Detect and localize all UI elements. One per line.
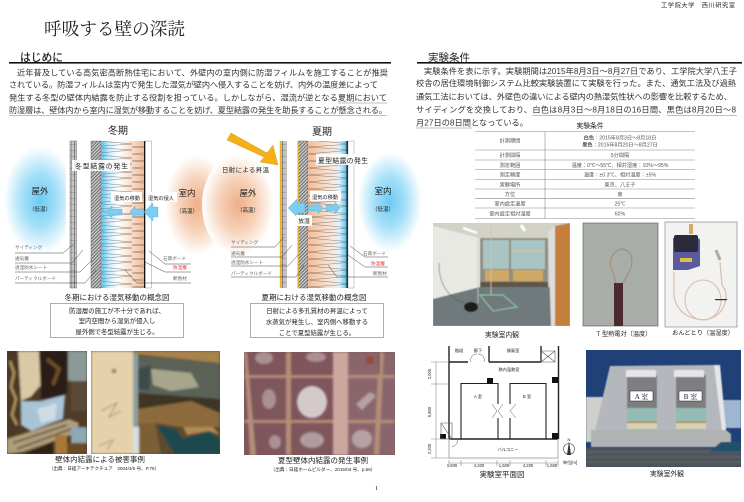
wall layer labels: パーティクルボード (15, 275, 56, 282)
sign: room B: B 室 (684, 392, 697, 401)
caption: floor plan: 実験室平面図 (480, 469, 524, 479)
labels: outdoor: 屋外 (239, 188, 257, 198)
table: experimental conditions: 室内設定温度 (494, 200, 526, 208)
labels: outdoor (237, 188, 259, 214)
sign: room A (630, 391, 653, 401)
outdoor hot glow (202, 155, 274, 255)
north compass: N (568, 437, 571, 442)
caption: thermocouple: T 型熱電対（温度） (597, 330, 651, 338)
photo: winter condensation damage, right (91, 351, 220, 454)
table: experimental conditions: 5分間隔 (611, 151, 629, 159)
wall layer labels: 石膏ボード (163, 255, 186, 262)
table title: 実験条件 (576, 121, 604, 130)
floor plan: 1,600 (499, 463, 510, 468)
callout: summer condensation: 夏型結露の発生 (318, 156, 368, 165)
wall layer labels: 防湿層 (173, 264, 187, 271)
label: solar heating: 日射による昇温 (222, 165, 270, 174)
labels: indoor (176, 188, 198, 215)
header: laboratory name: 工学院大学 西川研究室 (661, 2, 735, 10)
wall layer labels: サイディング (231, 239, 259, 246)
labels: outdoor (29, 186, 51, 213)
caption: condensation damage: 壁体内結露による被害事例 (55, 454, 145, 464)
intro paragraph: 防湿層は、壁体内から室内に湿気が移動することを妨げ、夏型結露の発生を助長することが懸念される。 (9, 105, 387, 115)
labels: indoor: （低温） (372, 205, 394, 213)
table: experimental conditions: 東京、八王子 (604, 180, 636, 188)
heading: winter: 冬期 (108, 124, 128, 137)
wall layer labels: 通気層 (15, 255, 29, 262)
caption: exterior: 実験室外観 (650, 469, 684, 478)
dimension lines (431, 362, 558, 466)
floor plan: 廊下 (474, 347, 482, 354)
label: moisture movement (310, 191, 341, 201)
explanation box: summer: 日射による多孔質材の昇温によって (266, 306, 368, 315)
indoor warm glow (165, 155, 229, 255)
caption: interior: 実験室内観 (485, 330, 519, 339)
doors (452, 354, 516, 447)
caption: summer condensation: 夏型壁体内結露の発生事例 (278, 455, 368, 465)
wall layer labels (231, 237, 388, 277)
photo: T-type thermocouple (583, 223, 658, 326)
table: experimental conditions: 25℃ (615, 200, 625, 208)
moisture movement labels: 湿気の侵入 (148, 194, 175, 202)
conditions paragraph: 実験条件を表に示す。実験期間は2015年8月3日～8月27日であり、工学院大学八王子 (424, 66, 737, 76)
floor plan: A 室 (474, 393, 482, 399)
walls (449, 346, 558, 439)
wall layer labels: 透湿防水シート (15, 264, 47, 271)
conditions paragraph: サイディングを交換しており、白色は8月3日～8月18日の16日間、黒色は8月20日～8 (416, 104, 736, 114)
table: experimental conditions: 60% (615, 212, 626, 218)
explanation box: winter (50, 304, 184, 338)
intro paragraph (9, 68, 388, 116)
sign: room B (679, 391, 702, 401)
stair symbol and columns (441, 351, 555, 439)
explanation box: winter: 防湿層の施工が不十分であれば、 (69, 306, 165, 315)
label: moisture movement: 湿気の移動 (312, 193, 338, 201)
outdoor cold glow (4, 146, 76, 254)
source: summer photo: （出典：日経ホームビルダー、2015/03 号、p.66） (271, 466, 375, 473)
photo: summer condensation example (244, 352, 395, 455)
wall layer labels: 防湿層 (371, 260, 385, 267)
table: experimental conditions: 測定精度 (500, 170, 520, 178)
indoor cool glow (358, 152, 422, 252)
table: experimental conditions: 実験場所 (500, 180, 520, 188)
floor plan: 階段 (455, 347, 464, 354)
conditions paragraph (416, 66, 737, 128)
wall layer labels: 断熱材 (173, 275, 187, 282)
table: experimental conditions: 黒色：2015年8月20日～8月27日 (582, 140, 658, 148)
table: experimental conditions: 温度：0℃～55℃、相対湿度：10%～95% (572, 161, 669, 169)
diagram: summer wall (202, 126, 422, 338)
photo: Ondotori logger (665, 222, 737, 327)
title: 呼吸する壁の深読 (44, 19, 185, 39)
wall layer labels: 通気層 (231, 250, 245, 257)
caption: Ondotori: おんどとり（温湿度） (672, 329, 734, 337)
table: experimental conditions: 南 (617, 190, 623, 198)
table: experimental conditions: 計測間隔 (500, 151, 520, 159)
table: experimental conditions: 計測期間 (500, 136, 520, 144)
arrows: moisture moving outward (105, 203, 158, 221)
conditions paragraph: 通気工法においては、外壁色の違いによる壁内の熱湿気性状への影響を比較するため、 (416, 92, 732, 102)
labels: indoor: （高温） (176, 207, 198, 215)
wall layer labels: 断熱材 (373, 270, 387, 277)
labels: outdoor: （高温） (237, 206, 259, 214)
explanation box: summer: 水蒸気が発生し、室内側へ移動する (266, 317, 368, 326)
intro paragraph: 発生する冬型の壁体内結露を防止する役割を担っている。しかしながら、湿流が逆となる夏期において (9, 92, 387, 102)
caption: summer: 夏期における湿気移動の概念図 (262, 292, 366, 302)
heading: introduction: はじめに (20, 51, 63, 64)
callout: winter condensation: 冬型結露の発生 (75, 162, 128, 170)
photo: test room interior (433, 223, 570, 326)
moisture movement labels: 湿気の移動 (114, 194, 140, 202)
moisture movement labels (111, 192, 177, 202)
explanation box: winter: 屋外側で冬型結露が生じる。 (75, 327, 159, 336)
wall section (277, 141, 355, 288)
table: experimental conditions: 方位 (505, 190, 515, 198)
explanation box: winter: 室内空間から湿気が侵入し (79, 316, 155, 325)
callout: winter condensation (72, 160, 130, 171)
floor plan (427, 346, 577, 468)
page number: 1 (375, 485, 378, 492)
heading: experimental conditions: 実験条件 (428, 51, 470, 64)
intro paragraph: 近年普及している高気密高断熱住宅において、外壁内の室内側に防湿フィルムを施工することが推奨 (17, 68, 388, 78)
table: experimental conditions: 測定範囲 (500, 161, 520, 169)
conditions paragraph: 校舎の居住環境制御システム比較実験装置にて実験を行った。また、通気工法及び過熱 (416, 78, 736, 88)
floor plan: 2,000 (427, 368, 432, 379)
floor plan: 単位[m] (563, 459, 577, 466)
wall layer labels: パーティクルボード (231, 270, 272, 277)
table: experimental conditions: 室内設定相対湿度 (489, 210, 531, 218)
diagram: winter wall (4, 124, 229, 338)
photo: winter condensation damage, left (7, 351, 87, 454)
floor plan: 1,600 (447, 463, 458, 468)
wall section (66, 141, 152, 288)
heading: summer: 夏期 (312, 126, 332, 138)
sign: room A: A 室 (635, 392, 648, 401)
wall layer labels: 石膏ボード (363, 250, 386, 257)
section: experimental conditions (416, 51, 742, 128)
floor plan: 4,200 (474, 463, 485, 468)
arrow: solar radiation (227, 133, 278, 165)
table: experimental conditions: 温度：±0.3℃、相対湿度：±5% (584, 170, 657, 178)
table: experimental conditions: 白色：2015年8月3日～8月18日 (584, 134, 656, 142)
wall layer labels (15, 243, 191, 283)
table: experimental conditions (475, 121, 695, 218)
label: moisture release: 放湿 (298, 217, 310, 225)
labels: indoor: 室内 (374, 186, 392, 196)
conditions paragraph: 月27日の8日間となっている。 (416, 118, 528, 128)
explanation box: summer (250, 304, 384, 338)
floor plan: 1,600 (547, 463, 558, 468)
labels: indoor (372, 186, 394, 213)
floor plan: 熱内温熱室 (499, 366, 519, 373)
north compass (564, 437, 574, 455)
label: moisture release (296, 215, 312, 226)
labels: outdoor: （低温） (29, 205, 51, 213)
callout: summer condensation (316, 154, 370, 165)
caption: winter: 冬期における湿気移動の概念図 (64, 292, 170, 302)
floor plan: 2,200 (427, 443, 432, 454)
floor plan: バルコニー (498, 447, 518, 452)
floor plan: 5,800 (427, 406, 432, 417)
floor plan: 操風室 (507, 347, 519, 354)
wall layer labels: 透湿防水シート (231, 259, 263, 266)
labels: indoor: 室内 (178, 188, 196, 198)
wall layer labels: サイディング (15, 244, 43, 251)
section: introduction (9, 51, 391, 116)
floor plan: 4,200 (523, 463, 534, 468)
explanation box: summer: ことで夏型結露が生じる。 (279, 328, 355, 337)
arrows: moisture moving indoors (288, 199, 340, 217)
labels: outdoor: 屋外 (31, 186, 49, 196)
source: damage photos: （出典：日経アーキテクチュア 2004/4/5 号、P.78） (49, 465, 159, 472)
floor plan: B 室 (523, 393, 531, 399)
photo: test room exterior (586, 350, 741, 467)
intro paragraph: されている。防湿フィルムは室内で発生した湿気が壁内へ侵入することを妨げ、内外の温度差によって (9, 80, 378, 90)
